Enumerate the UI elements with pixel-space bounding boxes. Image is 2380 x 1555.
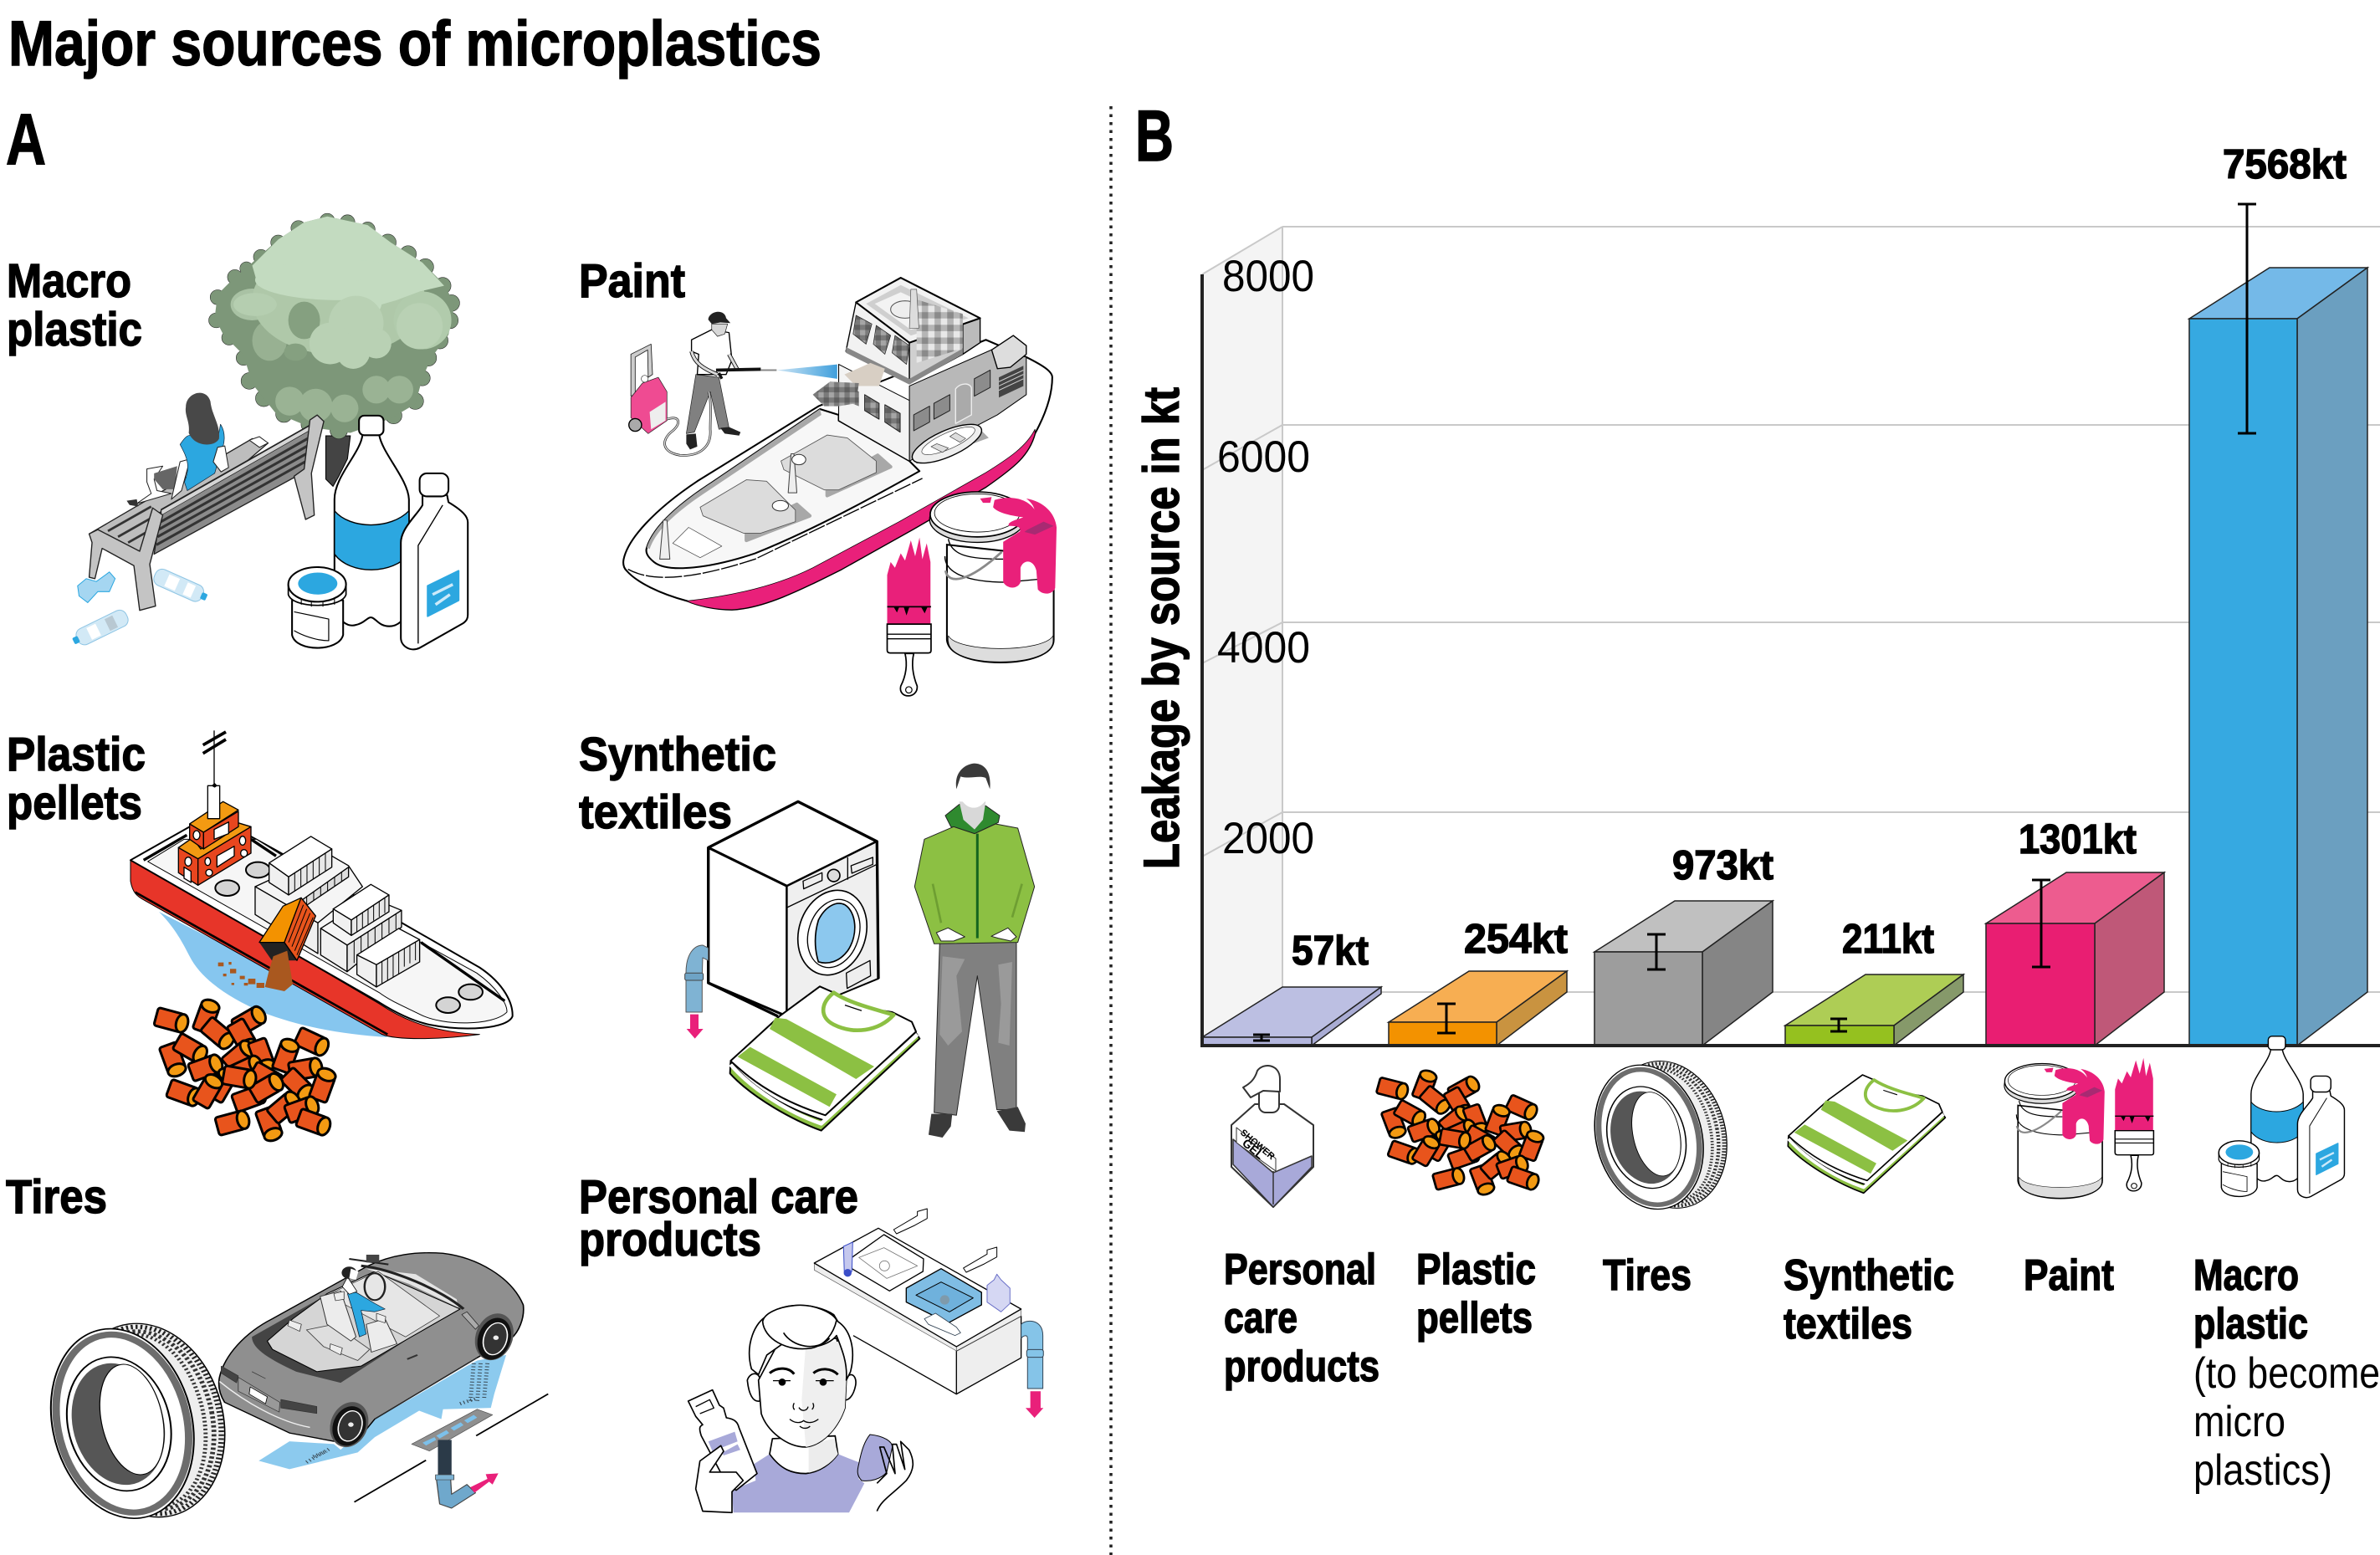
panel: plastic pellets — [7, 728, 513, 1143]
illustration: bench with person — [90, 393, 324, 611]
panel label A: A — [6, 100, 46, 180]
icon: soap dispenser — [1231, 1066, 1313, 1207]
icon: tire — [1582, 1054, 1739, 1217]
chart walls — [1202, 227, 2380, 1046]
icon: pellets pile — [154, 997, 337, 1143]
axes — [1202, 274, 2380, 1046]
panel: macro plastic — [7, 213, 468, 649]
category label: plastic pellets: Plastic — [1416, 1246, 1536, 1294]
panel: personal care products — [579, 1170, 1043, 1512]
error bars — [1253, 204, 2256, 1041]
category label: macro plastic: plastic — [2193, 1300, 2308, 1348]
value labels: 973kt — [1672, 843, 1773, 888]
y axis ticks: 4000 — [1217, 623, 1310, 673]
icon: folded sweater — [730, 986, 919, 1131]
category label: paint: Paint — [2024, 1251, 2114, 1300]
dotted divider — [1109, 106, 1113, 1555]
bar: tires — [1594, 901, 1773, 1046]
value labels: 211kt — [1842, 917, 1934, 962]
illustration: boat — [623, 278, 1052, 610]
bar: plastic pellets — [1389, 971, 1567, 1046]
value labels: 1301kt — [2019, 817, 2137, 862]
heading: macro plastic: plastic — [7, 303, 142, 356]
category label: macro plastic: Macro — [2193, 1251, 2299, 1300]
panel: paint — [579, 254, 1057, 696]
icon: tire — [34, 1314, 241, 1529]
icon: paint can — [929, 492, 1057, 662]
heading: plastic pellets: Plastic — [7, 728, 146, 781]
icon: paint brush — [888, 538, 931, 696]
heading: plastic pellets: pellets — [7, 776, 142, 830]
category label: synthetic textiles — [1784, 1251, 1954, 1348]
bar: macro plastic — [2189, 268, 2367, 1046]
icon: soap dispenser: GEL — [1240, 1136, 1267, 1162]
panel: bar chart — [1134, 142, 2380, 1495]
y axis ticks — [1217, 252, 1314, 863]
category label: synthetic textiles: textiles — [1784, 1300, 1912, 1348]
icon: soap dispenser: SHOWER — [1238, 1128, 1277, 1162]
icon: bottles, jug and jar — [289, 416, 468, 649]
illustration: man in green jacket — [914, 764, 1035, 1138]
title: Major sources of microplastics — [8, 8, 821, 79]
bar: paint — [1986, 872, 2164, 1046]
value labels — [1292, 142, 2347, 974]
category label: personal care products: Personal — [1224, 1246, 1376, 1294]
illustration: man with bottle and sponge — [688, 1305, 913, 1512]
icon: synthetic sweater — [1788, 1075, 1945, 1193]
category label: macro plastic: plastics) — [2193, 1446, 2332, 1495]
value labels: 254kt — [1464, 917, 1568, 962]
category label: plastic pellets: pellets — [1416, 1294, 1533, 1343]
heading: paint: Paint — [579, 254, 685, 308]
heading: personal care products — [579, 1170, 858, 1266]
illustration: spray puddle — [258, 1355, 506, 1469]
heading: synthetic textiles: textiles — [579, 785, 732, 839]
heading: tires: Tires — [6, 1170, 107, 1224]
illustration: container ship — [131, 730, 513, 1039]
illustration: washing machine — [685, 801, 878, 1039]
panel: synthetic textiles — [579, 728, 1035, 1138]
icon: discarded bottles — [69, 567, 210, 649]
icon: plastic pellets — [1376, 1068, 1545, 1197]
category label: tires: Tires — [1603, 1251, 1692, 1300]
bar: synthetic textiles — [1785, 974, 1963, 1046]
category label: personal care products: products — [1224, 1343, 1379, 1391]
illustration: person pressure washing — [629, 312, 837, 455]
category label: personal care products — [1224, 1246, 1379, 1391]
value labels: 7568kt — [2223, 142, 2347, 187]
category label: macro plastic — [2193, 1251, 2380, 1495]
illustration: car — [219, 1253, 524, 1462]
value labels: 57kt — [1292, 928, 1369, 974]
heading: macro plastic: Macro — [7, 254, 131, 308]
illustration: bathroom sink counter — [814, 1209, 1043, 1418]
illustration: tree — [209, 213, 459, 486]
panel: tires — [6, 1170, 548, 1529]
bar: personal care products — [1202, 987, 1381, 1046]
illustration: road and drain — [355, 1394, 548, 1508]
heading: personal care products: Personal care — [579, 1170, 858, 1224]
y axis ticks: 8000 — [1222, 252, 1314, 301]
y axis ticks: 2000 — [1222, 814, 1314, 863]
y axis ticks: 6000 — [1217, 432, 1310, 482]
heading: plastic pellets — [7, 728, 146, 830]
icon: macro plastic bottles — [2219, 1036, 2344, 1198]
icon: paint brush — [2115, 1058, 2153, 1191]
category label: personal care products: care — [1224, 1294, 1297, 1343]
category label: macro plastic: micro — [2193, 1398, 2285, 1446]
panel label B: B — [1135, 96, 1174, 176]
y axis title: Leakage by source in kt — [1134, 387, 1190, 869]
category label: synthetic textiles: Synthetic — [1784, 1251, 1954, 1300]
heading: synthetic textiles: Synthetic — [579, 728, 776, 781]
heading: personal care products: products — [579, 1213, 761, 1266]
heading: synthetic textiles — [579, 728, 776, 839]
category label: plastic pellets — [1416, 1246, 1536, 1343]
heading: macro plastic — [7, 254, 142, 356]
icon: paint can — [2004, 1064, 2105, 1199]
